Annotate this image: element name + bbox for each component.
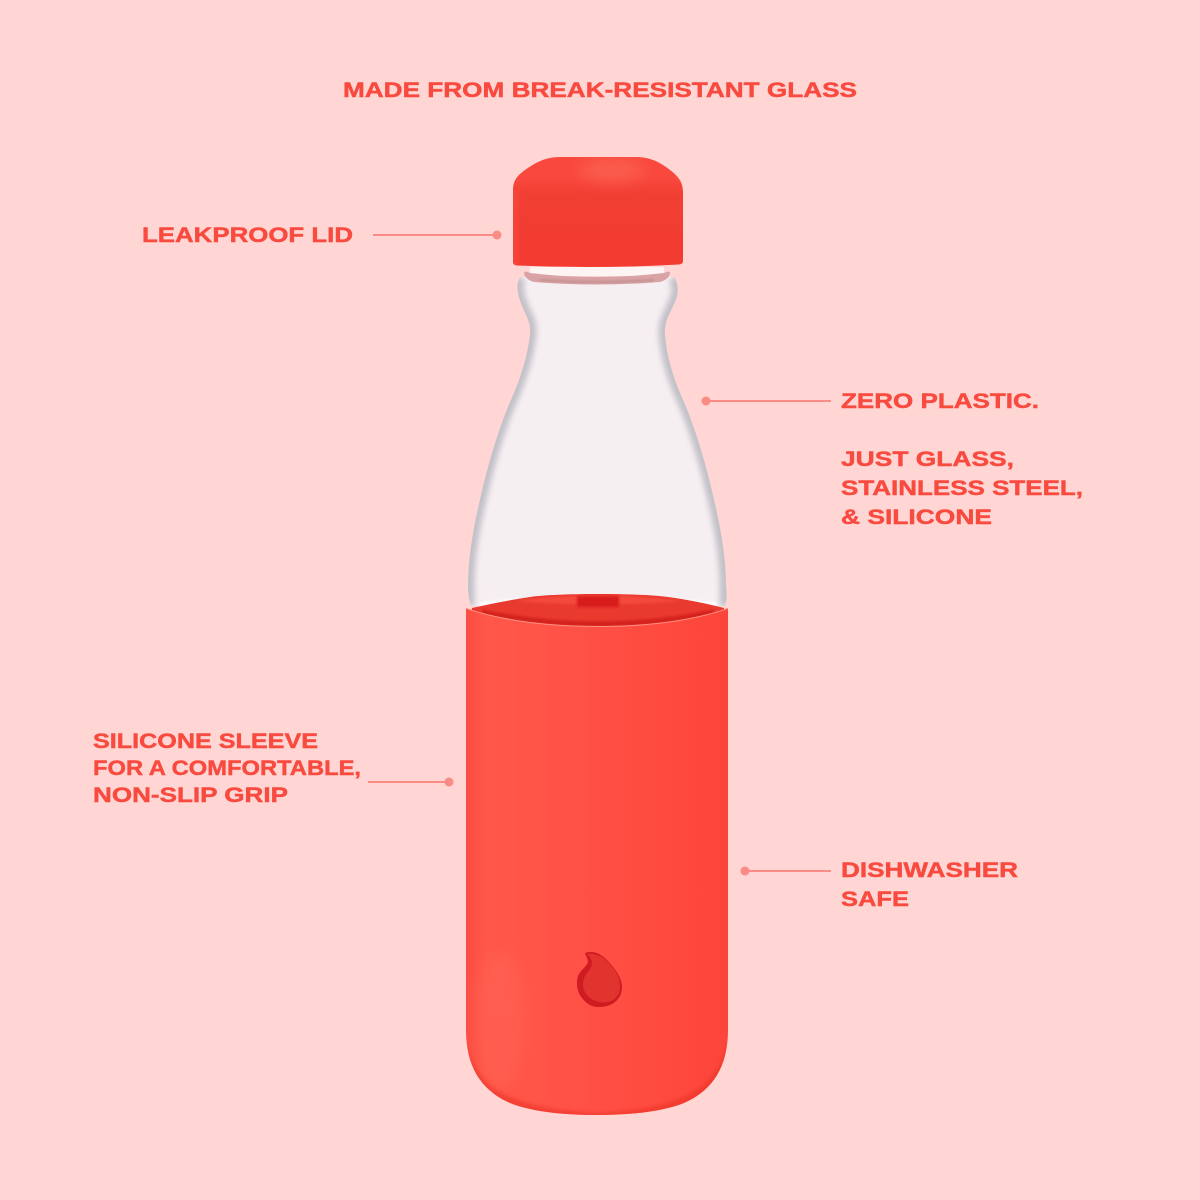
callout: dishwasher safe: SAFE [841, 888, 909, 911]
callout: zero plastic: JUST GLASS, [841, 448, 1014, 471]
icon: drop logo [577, 952, 622, 1007]
callout: zero plastic: STAINLESS STEEL, [841, 477, 1083, 500]
callout: dishwasher safe: DISHWASHER [841, 859, 1018, 882]
callout: silicone sleeve: NON-SLIP GRIP [93, 784, 288, 807]
lid [513, 157, 683, 267]
callout: leakproof lid [142, 224, 502, 247]
callout: dishwasher safe [740, 859, 1018, 911]
callout: leakproof lid: LEAKPROOF LID [142, 224, 353, 247]
callout: zero plastic: & SILICONE [841, 506, 992, 529]
glass body [468, 277, 727, 606]
silicone sleeve [460, 600, 735, 1120]
callout: silicone sleeve: FOR A COMFORTABLE, [93, 757, 361, 780]
neck ring [524, 267, 670, 284]
callout: zero plastic [702, 390, 1083, 529]
bottle [460, 150, 740, 1120]
callout: silicone sleeve: SILICONE SLEEVE [93, 730, 318, 753]
red base reflection [472, 594, 724, 630]
callout: zero plastic: ZERO PLASTIC. [841, 390, 1039, 413]
callout: silicone sleeve [93, 730, 454, 807]
title: MADE FROM BREAK-RESISTANT GLASS [343, 79, 857, 102]
